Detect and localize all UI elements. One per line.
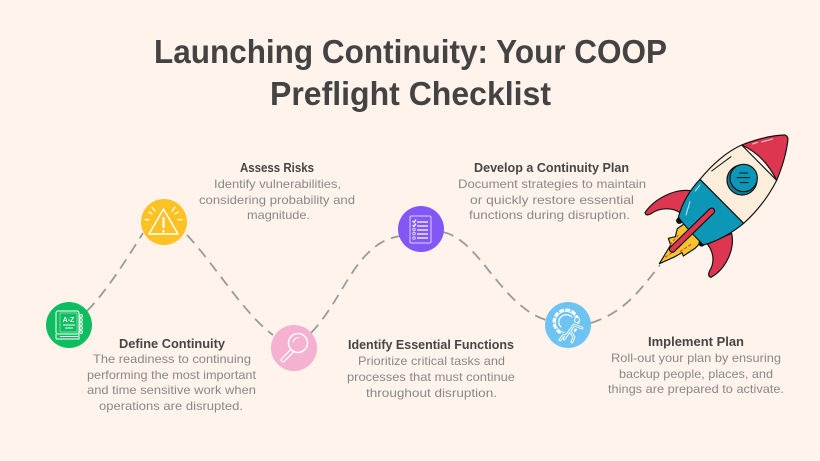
title bbox=[154, 33, 667, 112]
text: develop a continuity plan: Develop a Continuity Plan bbox=[474, 161, 629, 175]
text: define continuity: Define Continuity bbox=[119, 337, 225, 351]
text: assess risks: magnitude. bbox=[247, 208, 310, 222]
title: Launching Continuity: Your COOP bbox=[154, 33, 667, 70]
text: implement plan: things are prepared to activate. bbox=[608, 382, 784, 396]
text: implement plan: Implement Plan bbox=[648, 335, 744, 349]
nose cone bbox=[742, 135, 788, 180]
text: develop a continuity plan: or quickly restore essential bbox=[470, 193, 634, 207]
text: assess risks: Assess Risks bbox=[240, 161, 314, 175]
left fin bbox=[645, 190, 691, 215]
text: implement plan: Roll-out your plan by ensuring bbox=[611, 351, 781, 365]
text: define continuity bbox=[87, 337, 257, 413]
fin rod bbox=[672, 211, 712, 249]
text: develop a continuity plan: functions during disruption. bbox=[469, 208, 630, 222]
flame bbox=[659, 221, 703, 264]
text: define continuity: operations are disrupted. bbox=[99, 399, 243, 413]
icon: continuity plan checklist bbox=[398, 206, 444, 252]
text: identify essential functions: Prioritize critical tasks and bbox=[358, 354, 505, 368]
cream section bbox=[700, 145, 777, 223]
dashed flight path bbox=[87, 232, 660, 335]
icon: implement plan gear and runner bbox=[545, 302, 591, 348]
text: develop a continuity plan bbox=[458, 161, 646, 222]
text: assess risks: Identify vulnerabilities, bbox=[214, 177, 341, 191]
window bbox=[727, 165, 757, 195]
highlights bbox=[686, 139, 773, 215]
text: identify essential functions: throughout disruption. bbox=[366, 386, 497, 400]
text: identify essential functions: processes that must continue bbox=[347, 370, 515, 384]
icon: define continuity book bbox=[46, 302, 92, 348]
text: implement plan bbox=[608, 335, 784, 396]
icon: essential functions magnifier bbox=[271, 325, 317, 371]
text: implement plan: backup people, places, and bbox=[619, 367, 773, 381]
rocket illustration bbox=[645, 135, 788, 277]
text: assess risks bbox=[199, 161, 355, 222]
text: define continuity: and time sensitive work when bbox=[87, 383, 256, 397]
text: develop a continuity plan: Document strategies to maintain bbox=[458, 177, 646, 191]
icon: assess risks warning bbox=[141, 199, 187, 245]
icon: define continuity book: A-Z bbox=[63, 317, 75, 324]
text: define continuity: The readiness to continuing bbox=[93, 352, 251, 366]
blue section bbox=[678, 179, 744, 245]
text: define continuity: performing the most important bbox=[87, 368, 257, 382]
text: assess risks: considering probability and bbox=[199, 193, 355, 207]
title: Preflight Checklist bbox=[270, 75, 551, 112]
right fin bbox=[707, 233, 732, 277]
text: identify essential functions: Identify Essential Functions bbox=[348, 338, 514, 352]
text: identify essential functions bbox=[347, 338, 515, 400]
